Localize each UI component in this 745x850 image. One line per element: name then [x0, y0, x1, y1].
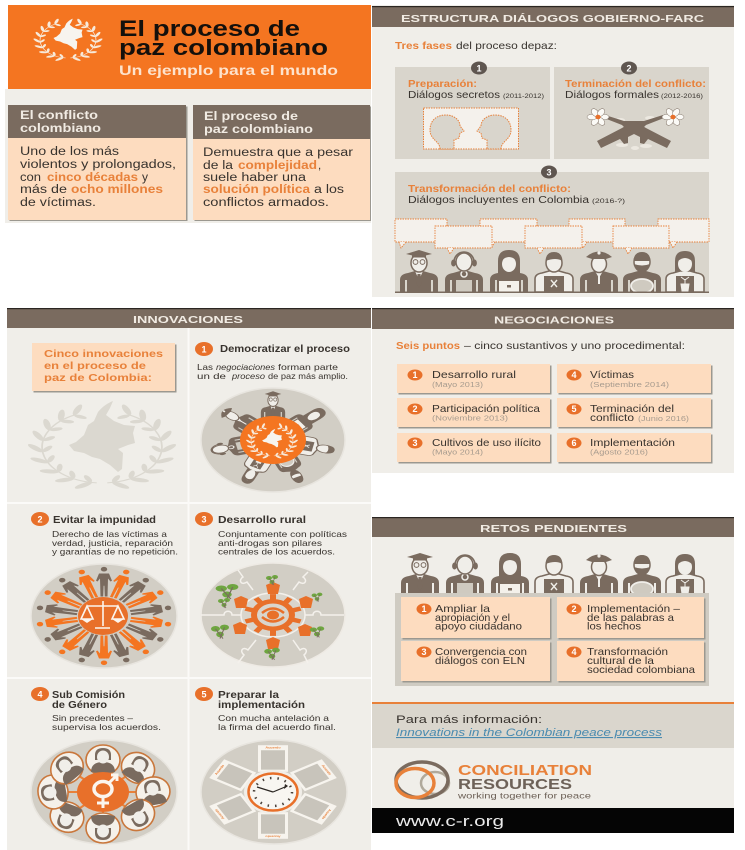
- logo: Conciliation Resources: [396, 762, 592, 800]
- point 1: (Mayo 2013): [432, 380, 484, 389]
- challenge 3: 3: [421, 647, 427, 657]
- people row: [401, 553, 704, 596]
- icon: Colombia map with laurel wreath: [33, 18, 103, 61]
- grey challenges block: [395, 593, 709, 686]
- challenge 2: los hechos: [587, 620, 641, 632]
- heading: innovaciones: INNOVACIONES: [133, 314, 243, 326]
- challenge 1: apropiación y el: [435, 612, 510, 624]
- card: El conflicto colombiano: de víctimas.: [20, 197, 96, 209]
- phase 3: transformación: (2016-?): [592, 198, 625, 205]
- point 6: (Agosto 2016): [590, 448, 649, 456]
- text: tres fases: Tres fases: [395, 40, 452, 52]
- phase 1: preparación: (2011-2012): [503, 93, 544, 100]
- diagram: women around gender symbol: [31, 740, 177, 844]
- innovation 2: 2: [37, 514, 43, 524]
- phase 3: transformación: Diálogos incluyentes en Colombia: [408, 195, 590, 206]
- phase 3: transformación: Transformación del conflicto:: [408, 184, 571, 195]
- point 5: (Junio 2016): [638, 414, 690, 423]
- logo: Conciliation Resources: CONCILIATION: [458, 762, 592, 779]
- innovation 1: Las: [197, 362, 213, 372]
- innovation 5: Con mucha antelación a: [218, 713, 329, 723]
- card: El conflicto colombiano: El conflicto: [20, 110, 98, 122]
- innovation 1: negociaciones: [216, 362, 276, 372]
- phase 2: terminación: 2: [626, 64, 632, 74]
- innovation 3: Desarrollo rural: [218, 515, 306, 526]
- point 6: 6: [571, 438, 577, 448]
- innovation 1: de paz más amplio.: [268, 371, 348, 381]
- diagram: clock and agreements: [201, 740, 347, 844]
- heading: innovaciones: [7, 308, 371, 328]
- heading: estructura: [372, 6, 734, 27]
- text: tres fases: [395, 40, 557, 52]
- logo: Conciliation Resources: RESOURCES: [458, 776, 572, 793]
- heading: retos: [372, 517, 734, 537]
- card: El proceso de paz colombiano: El proceso de: [204, 111, 298, 123]
- phase 1: preparación: 1: [476, 64, 482, 74]
- card: El conflicto colombiano: y: [142, 172, 148, 184]
- innovation 5: la firma del acuerdo final.: [218, 722, 336, 732]
- innovation 1: forman parte: [278, 362, 338, 372]
- innovation 3: Conjuntamente con políticas: [218, 529, 347, 539]
- innovation 3: centrales de los acuerdos.: [218, 546, 335, 556]
- card: El conflicto colombiano: más de: [20, 184, 67, 196]
- challenge 2: de las palabras a: [587, 612, 674, 624]
- challenge 2: 2: [571, 604, 577, 614]
- panel: header block: [5, 5, 371, 223]
- panel: retos pendientes: [372, 517, 734, 702]
- innovation 3: [195, 512, 347, 667]
- people row: [395, 250, 709, 293]
- panel: innovaciones: [7, 308, 371, 850]
- heading: estructura: ESTRUCTURA DIÁLOGOS GOBIERNO-FARC: [401, 12, 705, 25]
- logo: Conciliation Resources: working together for peace: [457, 790, 591, 800]
- phase 1: preparación: [395, 62, 550, 159]
- point 3: (Mayo 2014): [432, 448, 484, 456]
- panel: footer: [372, 702, 734, 833]
- innovation 1: proceso: [231, 371, 265, 381]
- card: El proceso de paz colombiano: paz colombiano: [204, 124, 313, 136]
- card: cinco innovaciones: paz de Colombia:: [44, 372, 152, 384]
- card: El proceso de paz colombiano: ,: [318, 160, 321, 172]
- phase 1: preparación: Preparación:: [408, 79, 477, 90]
- text: seis puntos: [396, 340, 685, 352]
- innovation 5: [195, 687, 347, 844]
- card: El conflicto colombiano: con: [20, 172, 41, 184]
- innovation 2: Derecho de las víctimas a: [52, 529, 167, 539]
- point 5: 5: [571, 404, 577, 414]
- innovation 4: Sub Comisión: [52, 690, 125, 701]
- icon: large Colombia map with wreath: [26, 401, 178, 490]
- more information band: [372, 702, 734, 748]
- challenge 4: Transformación: [587, 646, 668, 658]
- challenge 3: Convergencia con: [435, 646, 527, 658]
- card: cinco innovaciones: en el proceso de: [44, 360, 146, 372]
- card: El proceso de paz colombiano: de la: [203, 160, 234, 172]
- innovation 3: anti-drogas son pilares: [218, 538, 322, 548]
- card: cinco innovaciones: Cinco innovaciones: [44, 348, 163, 360]
- challenge 1: 1: [421, 604, 427, 614]
- card: El conflicto colombiano: violentos y prolongados,: [20, 159, 176, 171]
- card: El proceso de paz colombiano: [193, 105, 371, 221]
- challenge 1: apoyo ciudadano: [435, 620, 522, 632]
- speech bubbles: [395, 219, 709, 254]
- challenge 1: [401, 597, 552, 640]
- panel: negociaciones: [372, 308, 734, 473]
- diagram: people around the Colombia logo: [201, 388, 345, 492]
- card: El conflicto colombiano: [8, 105, 188, 221]
- phase 2: terminación: Terminación del conflicto:: [565, 79, 706, 90]
- innovation 1: 1: [201, 344, 207, 354]
- card: El conflicto colombiano: colombiano: [20, 123, 101, 135]
- card: El conflicto colombiano: Uno de los más: [20, 146, 119, 158]
- point 2: Participación política: [432, 403, 540, 415]
- innovation 1: Democratizar el proceso: [220, 344, 350, 355]
- challenge 4: [557, 641, 706, 682]
- card: El proceso de paz colombiano: solución política: [203, 184, 311, 196]
- card: El proceso de paz colombiano: suele haber una: [203, 172, 307, 184]
- heading: negociaciones: [372, 308, 734, 329]
- point 3: [397, 433, 552, 464]
- challenge 4: sociedad colombiana: [587, 664, 695, 676]
- point 5: conflicto: [590, 412, 634, 424]
- icon: clock: [244, 770, 302, 814]
- challenge 3: [401, 641, 552, 682]
- point 4: 4: [571, 370, 577, 380]
- title banner: [8, 5, 371, 89]
- website band: [372, 808, 734, 833]
- card: El conflicto colombiano: ocho millones: [71, 184, 163, 196]
- challenge 2: [557, 597, 706, 640]
- card: El proceso de paz colombiano: Demuestra que a pesar: [203, 147, 353, 159]
- point 1: [397, 364, 552, 394]
- innovation 2: verdad, justicia, reparación: [52, 538, 173, 548]
- point 4: [557, 364, 712, 394]
- card: El proceso de paz colombiano: complejidad: [238, 160, 317, 172]
- challenge 4: 4: [571, 647, 577, 657]
- title: El proceso de: [119, 16, 300, 41]
- point 2: 2: [412, 404, 418, 414]
- title: paz colombiano: [119, 35, 328, 60]
- website band: www.c-r.org: [395, 813, 504, 830]
- point 2: [397, 398, 552, 428]
- phase 2: terminación: (2012-2016): [661, 93, 703, 100]
- innovation 4: [31, 687, 177, 844]
- point 4: (Septiembre 2014): [590, 380, 670, 389]
- phase 3: transformación: [395, 166, 709, 293]
- phase 1: preparación: Diálogos secretos: [408, 90, 500, 101]
- innovation 2: Evitar la impunidad: [53, 515, 156, 526]
- innovation 2: y garantías de no repetición.: [52, 546, 178, 556]
- point 3: Cultivos de uso ilícito: [432, 437, 541, 449]
- subtitle: Un ejemplo para el mundo: [119, 62, 338, 78]
- challenge 2: Implementación –: [587, 603, 680, 615]
- phase 2: terminación: [554, 62, 709, 159]
- more information band: Para más información:: [396, 714, 542, 726]
- point 6: [557, 433, 712, 464]
- point 6: Implementación: [590, 437, 675, 449]
- point 5: [557, 398, 712, 428]
- card: El conflicto colombiano: cinco décadas: [47, 172, 138, 184]
- innovation 4: supervisa los acuerdos.: [52, 722, 161, 732]
- point 1: Desarrollo rural: [432, 369, 516, 381]
- challenge 3: diálogos con ELN: [435, 655, 525, 667]
- diagram: human chain around scales of justice: [31, 564, 177, 668]
- text: tres fases: del proceso depaz:: [456, 40, 557, 52]
- text: seis puntos: Seis puntos: [396, 340, 460, 352]
- innovation 4: de Género: [52, 700, 107, 711]
- innovation 4: 4: [37, 690, 43, 700]
- icon: two heads: [424, 108, 518, 149]
- innovation 5: 5: [201, 690, 207, 700]
- card: El proceso de paz colombiano: conflictos armados.: [203, 197, 329, 209]
- diagram: puzzle with gear and plants: [201, 563, 345, 667]
- title: [119, 16, 328, 60]
- innovation 3: 3: [201, 514, 207, 524]
- heading: negociaciones: NEGOCIACIONES: [494, 314, 614, 326]
- more information band: Innovations in the Colombian peace process: [396, 727, 663, 739]
- text: seis puntos: – cinco sustantivos y uno procedimental:: [464, 340, 685, 352]
- innovation 2: [31, 512, 178, 668]
- point 5: Terminación del: [590, 403, 674, 415]
- point 3: 3: [412, 438, 418, 448]
- innovation 4: Sin precedentes –: [52, 713, 133, 723]
- card: cinco innovaciones: [32, 343, 176, 392]
- innovation 5: implementación: [218, 700, 305, 711]
- challenge 1: Ampliar la: [435, 603, 490, 615]
- point 4: Víctimas: [590, 369, 634, 381]
- heading: retos: RETOS PENDIENTES: [480, 523, 627, 535]
- point 2: (Noviembre 2013): [432, 414, 509, 422]
- card: El proceso de paz colombiano: a los: [314, 184, 344, 196]
- innovation 5: Preparar la: [218, 690, 280, 701]
- icon: crossed rifles with flowers: [587, 108, 684, 150]
- point 1: 1: [412, 370, 418, 380]
- innovation 1: un de: [197, 371, 226, 381]
- challenge 4: cultural de la: [587, 655, 654, 667]
- phase 2: terminación: Diálogos formales: [565, 90, 659, 101]
- phase 3: transformación: 3: [546, 168, 552, 178]
- innovation 1: [195, 342, 350, 492]
- panel: estructura diálogos: [372, 5, 734, 297]
